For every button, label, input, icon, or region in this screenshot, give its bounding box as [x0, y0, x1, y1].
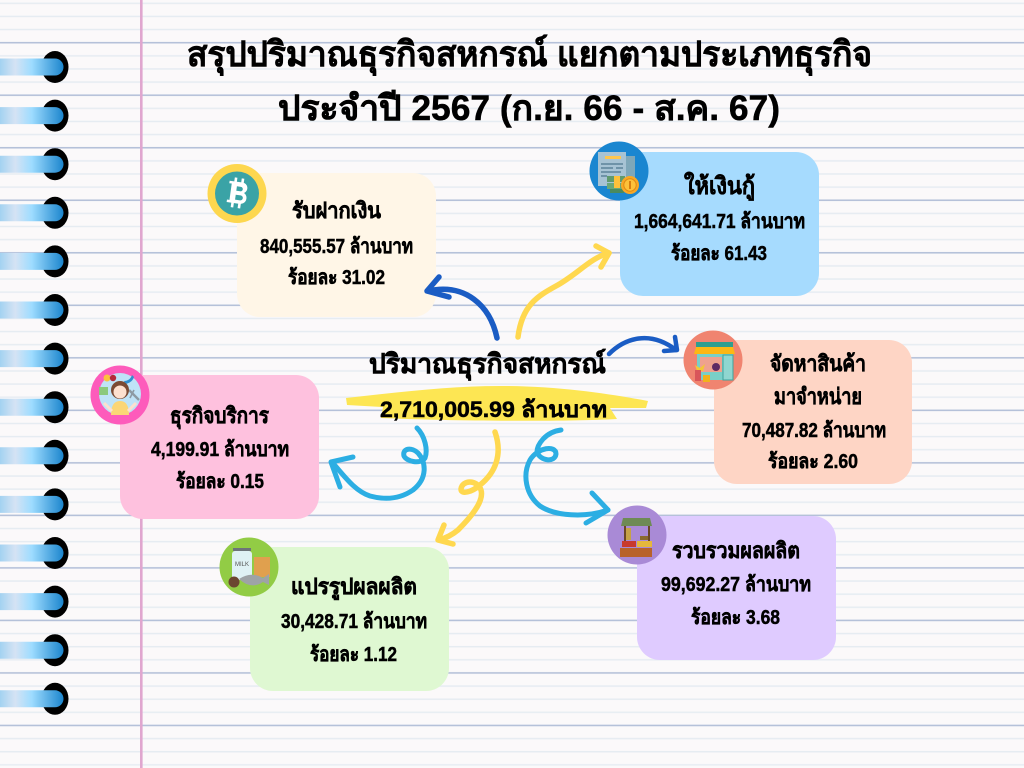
center total: 2,710,005.99 ล้านบาท: [380, 397, 607, 422]
panel: processing: [250, 547, 449, 691]
panel: services: [120, 375, 319, 519]
arrow: center to processing: [438, 432, 498, 544]
center total: [369, 348, 607, 422]
icon: milk flour and fish: MILK: [235, 561, 250, 568]
panel: services: ร้อยละ 0.15: [176, 470, 264, 493]
panel: collection: ร้อยละ 3.68: [691, 606, 780, 629]
title: สรุปปริมาณธุรกิจสหกรณ์ แยกตามประเภทธุรกิจ: [187, 34, 872, 76]
icon: milk flour and fish: [220, 538, 278, 596]
panel: collection: 99,692.27 ล้านบาท: [661, 573, 811, 596]
spiral binding rings: [0, 51, 68, 715]
icon: storefront: [684, 330, 742, 390]
panel: procurement: ร้อยละ 2.60: [768, 450, 858, 473]
panel: collection: รวบรวมผลผลิต: [672, 538, 800, 563]
title: ประจำปี 2567 (ก.ย. 66 - ส.ค. 67): [278, 89, 780, 128]
icon: loan document and coin: [590, 142, 648, 200]
icon: service woman: [90, 366, 150, 424]
arrow: center to services: [331, 428, 426, 498]
panel: loans: 1,664,641.71 ล้านบาท: [634, 210, 805, 233]
panel: procurement: [714, 340, 912, 484]
panel: procurement: มาจำหน่าย: [774, 384, 862, 409]
center total: ปริมาณธุรกิจสหกรณ์: [369, 348, 606, 381]
panel: services: 4,199.91 ล้านบาท: [151, 438, 289, 461]
panel: deposits: รับฝากเงิน: [292, 198, 381, 223]
panel: loans: ร้อยละ 61.43: [671, 242, 767, 265]
panel: processing: แปรรูปผลผลิต: [291, 574, 417, 601]
arrow: center to collection: [526, 430, 608, 523]
panel: deposits: 840,555.57 ล้านบาท: [260, 235, 413, 258]
panel: services: ธุรกิจบริการ: [170, 403, 269, 430]
arrow: center to deposits: [427, 277, 497, 338]
panel: collection: [637, 516, 836, 660]
title: [187, 34, 872, 128]
arrow: center to procurement: [609, 337, 677, 354]
panel: loans: ให้เงินกู้: [684, 171, 755, 201]
icon: produce market stall: [608, 506, 666, 564]
panel: procurement: จัดหาสินค้า: [770, 351, 866, 376]
panel: procurement: 70,487.82 ล้านบาท: [742, 419, 886, 442]
highlight brush: [346, 386, 648, 421]
panel: processing: 30,428.71 ล้านบาท: [281, 610, 427, 633]
arrow: center to loans: [518, 246, 609, 337]
icon: bitcoin coin: [208, 164, 266, 223]
panel: processing: ร้อยละ 1.12: [310, 643, 397, 666]
panel: deposits: ร้อยละ 31.02: [288, 266, 385, 289]
panel: loans: [620, 152, 819, 296]
panel: deposits: [237, 173, 436, 317]
